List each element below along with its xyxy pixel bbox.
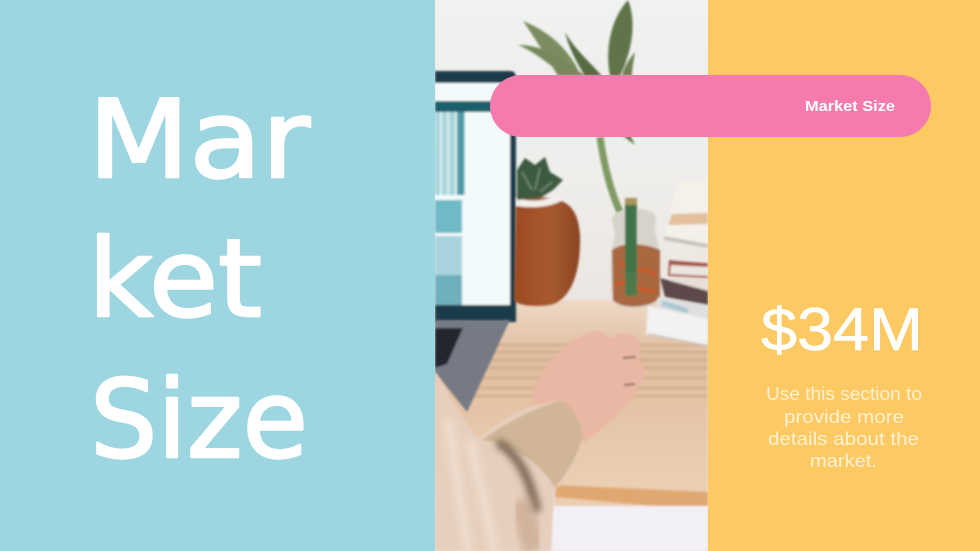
description text: details about the [768, 429, 919, 449]
panel: yellow stat background [708, 0, 980, 551]
description text: market. [810, 451, 877, 471]
heading: Market Size: ket [88, 217, 262, 342]
heading: Market Size: Mar [88, 78, 311, 203]
photo: laptop, plants and books on a desk [435, 0, 708, 551]
photo detail: glass vase [611, 198, 660, 308]
photo detail: desk [435, 300, 708, 551]
photo detail: potted succulent [514, 157, 580, 306]
photo detail: bamboo plant [518, 0, 635, 212]
photo detail: hand [532, 331, 644, 442]
photo detail: laptop base and keyboard [435, 320, 510, 412]
stat value: $34M [761, 296, 923, 363]
description text: provide more [784, 407, 904, 427]
photo detail: stack of books [645, 212, 708, 347]
panel: blue title background [0, 0, 435, 551]
photo detail: laptop screen [435, 71, 516, 322]
description text [766, 384, 922, 471]
photo detail: sweater sleeve [435, 372, 582, 551]
description text: Use this section to [766, 384, 922, 404]
heading: Market Size: Size [90, 358, 308, 483]
heading: Market Size [88, 78, 311, 483]
pill label text: Market Size [805, 98, 895, 115]
pink label pill [490, 75, 931, 137]
